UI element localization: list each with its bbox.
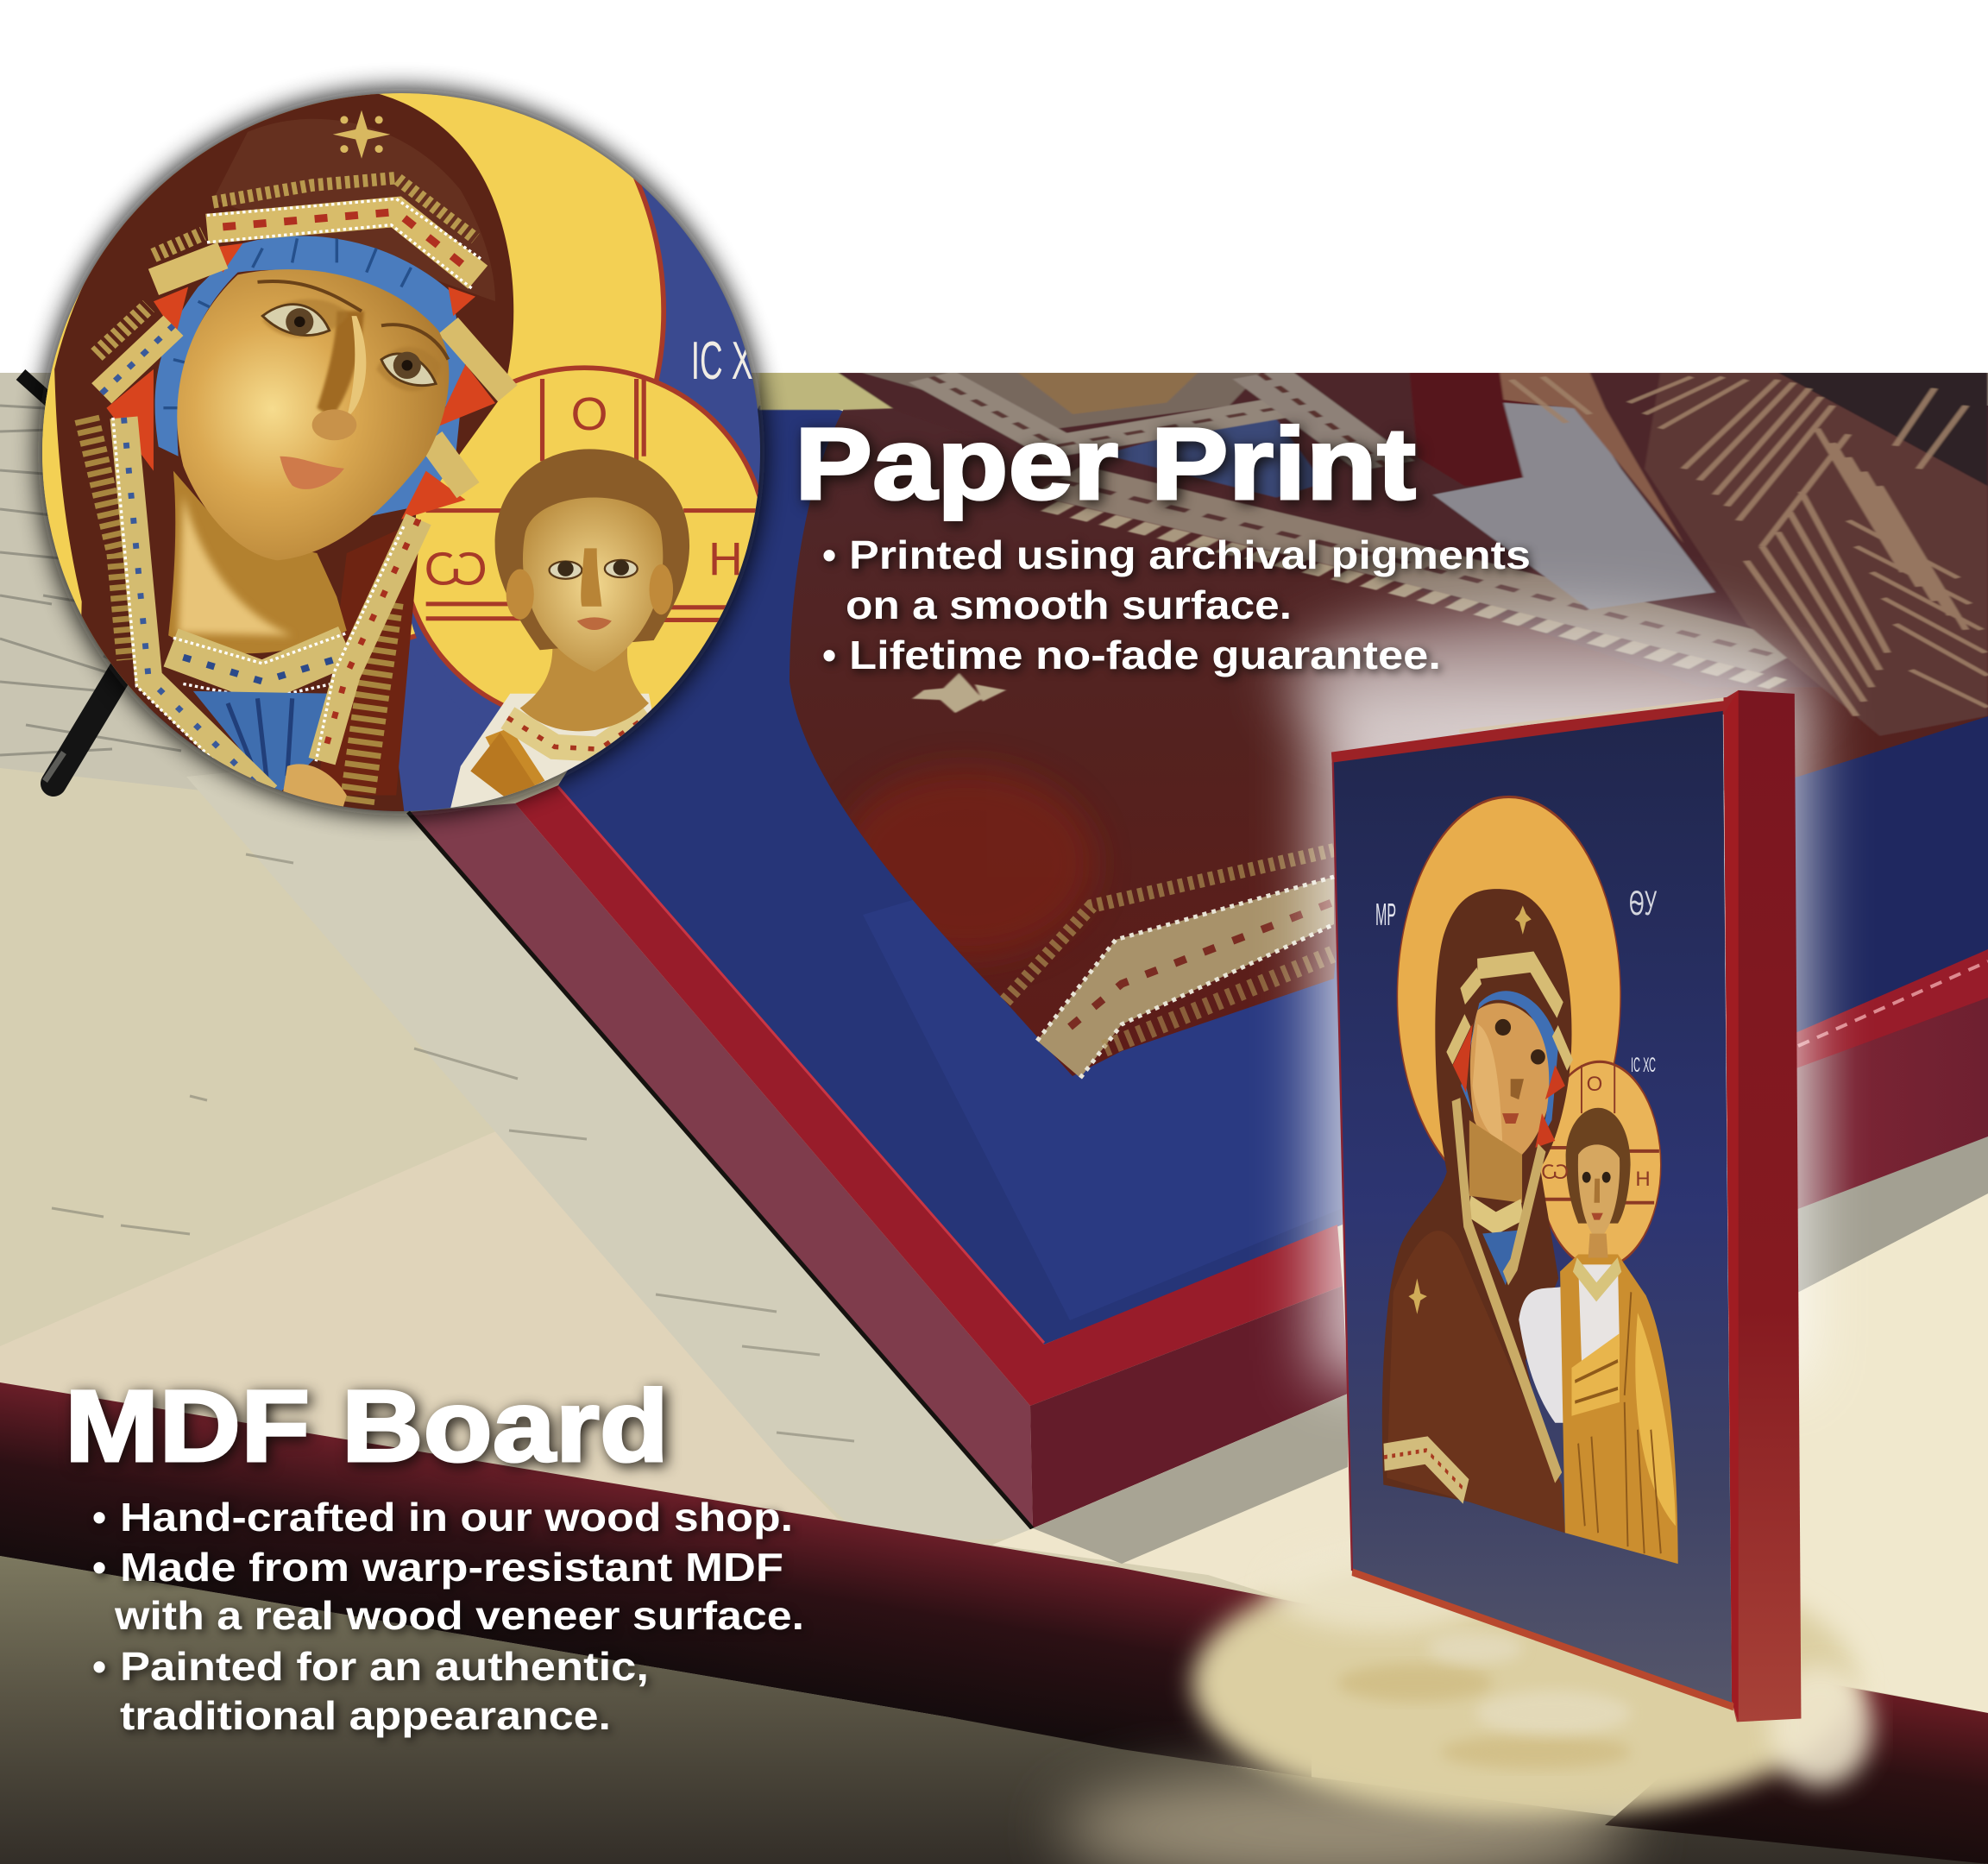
right side floors: [1798, 1193, 1988, 1713]
blue cap and red triangles: [1461, 991, 1558, 1141]
tan wood floor: [0, 373, 1988, 1864]
face: [1470, 1003, 1552, 1156]
title letters: ІС Х: [691, 331, 752, 391]
text block: MDF board bullets: •: [92, 1644, 106, 1689]
grey grain strip beside board: [186, 775, 783, 1464]
right blue field: [1795, 716, 1988, 1032]
neck of Mary: [1469, 1120, 1522, 1203]
child's eyes, nose and mouth: [550, 548, 638, 630]
neck: [861, 373, 1261, 429]
text block: paper print bullets: •: [822, 532, 836, 577]
top edge: [1331, 690, 1739, 766]
straw garment: [1645, 373, 1988, 736]
halo letters: Ѡ: [424, 543, 488, 595]
text block: paper print bullets: •: [822, 633, 836, 677]
child halo: [1538, 1061, 1661, 1268]
text block: MDF board bullets: •: [92, 1545, 106, 1590]
star motif: [912, 673, 1006, 713]
navy background: [0, 69, 792, 844]
shoulder stars: [1408, 1278, 1427, 1314]
blue head cap: [155, 236, 466, 517]
nose shadow and highlight: [317, 311, 364, 418]
beige blur under the rail: [1061, 1769, 1631, 1864]
halo letters: Ο: [571, 388, 607, 440]
red edges: [1352, 1572, 1733, 1707]
face: [177, 269, 449, 560]
text block: MDF board bullets: [92, 1495, 804, 1738]
neck trims: [124, 418, 267, 796]
text block: MDF board bullets: with a real wood veneer surface.: [114, 1593, 804, 1638]
blue inset: [1104, 408, 1324, 498]
black edge line: [408, 812, 1033, 1529]
board side face: [408, 803, 1033, 1528]
veil trim: [1456, 1099, 1558, 1477]
upper robe shade: [838, 373, 1988, 687]
veil: [54, 93, 513, 828]
facial features: [1495, 1019, 1545, 1124]
child: [1519, 1285, 1571, 1423]
text block: MDF board bullets: •: [92, 1495, 106, 1540]
robe red fold: [837, 768, 1096, 958]
board red rim: [515, 785, 1343, 1406]
neck: [168, 471, 347, 653]
child's halo: [402, 368, 767, 724]
collar ornament: [932, 377, 1276, 446]
enlarged icon detail: upper background: [759, 373, 1988, 736]
side face: [1724, 690, 1801, 1722]
collar: [171, 645, 347, 682]
bright glow behind small icon: [1316, 690, 1808, 1381]
khaki corner: [759, 373, 892, 410]
dark rail bottom right: [1605, 1674, 1988, 1864]
headband: [102, 198, 507, 490]
heading: MDF Board: MDF Board: [65, 1370, 669, 1483]
text block: MDF board bullets: Painted for an authentic,: [120, 1644, 649, 1689]
text block: paper print bullets: on a smooth surface.: [846, 582, 1292, 627]
navy crescent beneath halo: [401, 553, 644, 737]
small icon on the table: Ѡ: [1541, 1161, 1569, 1184]
peach floor patch: [0, 1132, 839, 1521]
dark cuff: [1410, 373, 1531, 486]
eyes: [257, 281, 448, 386]
upper weathered wood: [0, 373, 224, 790]
collar and blue garment: [1469, 1206, 1522, 1224]
small icon on the table: ѲУ: [1629, 885, 1657, 923]
sleeve ornament: [1384, 1451, 1466, 1491]
child: [446, 449, 689, 828]
child's head: [1566, 1108, 1631, 1224]
right red rail: [1796, 998, 1988, 1209]
text block: paper print bullets: Lifetime no-fade guarantee.: [849, 633, 1441, 677]
headband: [1477, 962, 1560, 1011]
lace fringe: [213, 178, 475, 238]
front face: [1332, 711, 1732, 1703]
eye shadow: [262, 299, 441, 391]
big halo: [1397, 797, 1620, 1196]
lower floor: [0, 1556, 1988, 1864]
Mary's halo: [0, 0, 664, 650]
small icon stand rod behind the circle: [21, 375, 125, 784]
mouth: [280, 457, 344, 489]
blue garment: [193, 691, 332, 796]
halo letters: [424, 388, 743, 595]
small icon on the table: [1331, 690, 1801, 1722]
small icon on the table: Ο: [1587, 1073, 1602, 1096]
heading: Paper Print: Paper Print: [795, 407, 1416, 521]
sleeve: [1433, 403, 1715, 609]
cream floor beyond board: [992, 1395, 1351, 1596]
circle drop shadow: [38, 89, 764, 816]
robe gold trim: [1005, 850, 1334, 1078]
dark red rail lower-left: [0, 1382, 1312, 1778]
hand: [277, 764, 347, 828]
hand: [1500, 373, 1683, 544]
board right dark side: [1030, 1286, 1348, 1528]
text block: paper print bullets: Printed using archival pigments: [849, 532, 1531, 577]
small icon on the table: МР: [1375, 897, 1396, 932]
robe: [790, 406, 1988, 1076]
text block: MDF board bullets: Hand-crafted in our wood shop.: [120, 1495, 793, 1540]
halo letters: Н: [708, 533, 743, 585]
forehead star: [333, 110, 390, 159]
text block: MDF board bullets: Made from warp-resistant MDF: [120, 1545, 783, 1590]
veil and robe: [1382, 889, 1571, 1533]
small icon on the table: Н: [1635, 1168, 1651, 1191]
circular close-up of the icon: [0, 0, 792, 844]
long band: [1057, 481, 1785, 658]
red triangles: [106, 243, 495, 520]
text block: paper print bullets: [822, 532, 1531, 677]
lit floor under small icon: [1192, 1549, 1857, 1817]
small icon on the table: ІС ХС: [1631, 1054, 1656, 1077]
text block: MDF board bullets: traditional appearance.: [120, 1693, 611, 1738]
board blue field: [558, 406, 1343, 1344]
